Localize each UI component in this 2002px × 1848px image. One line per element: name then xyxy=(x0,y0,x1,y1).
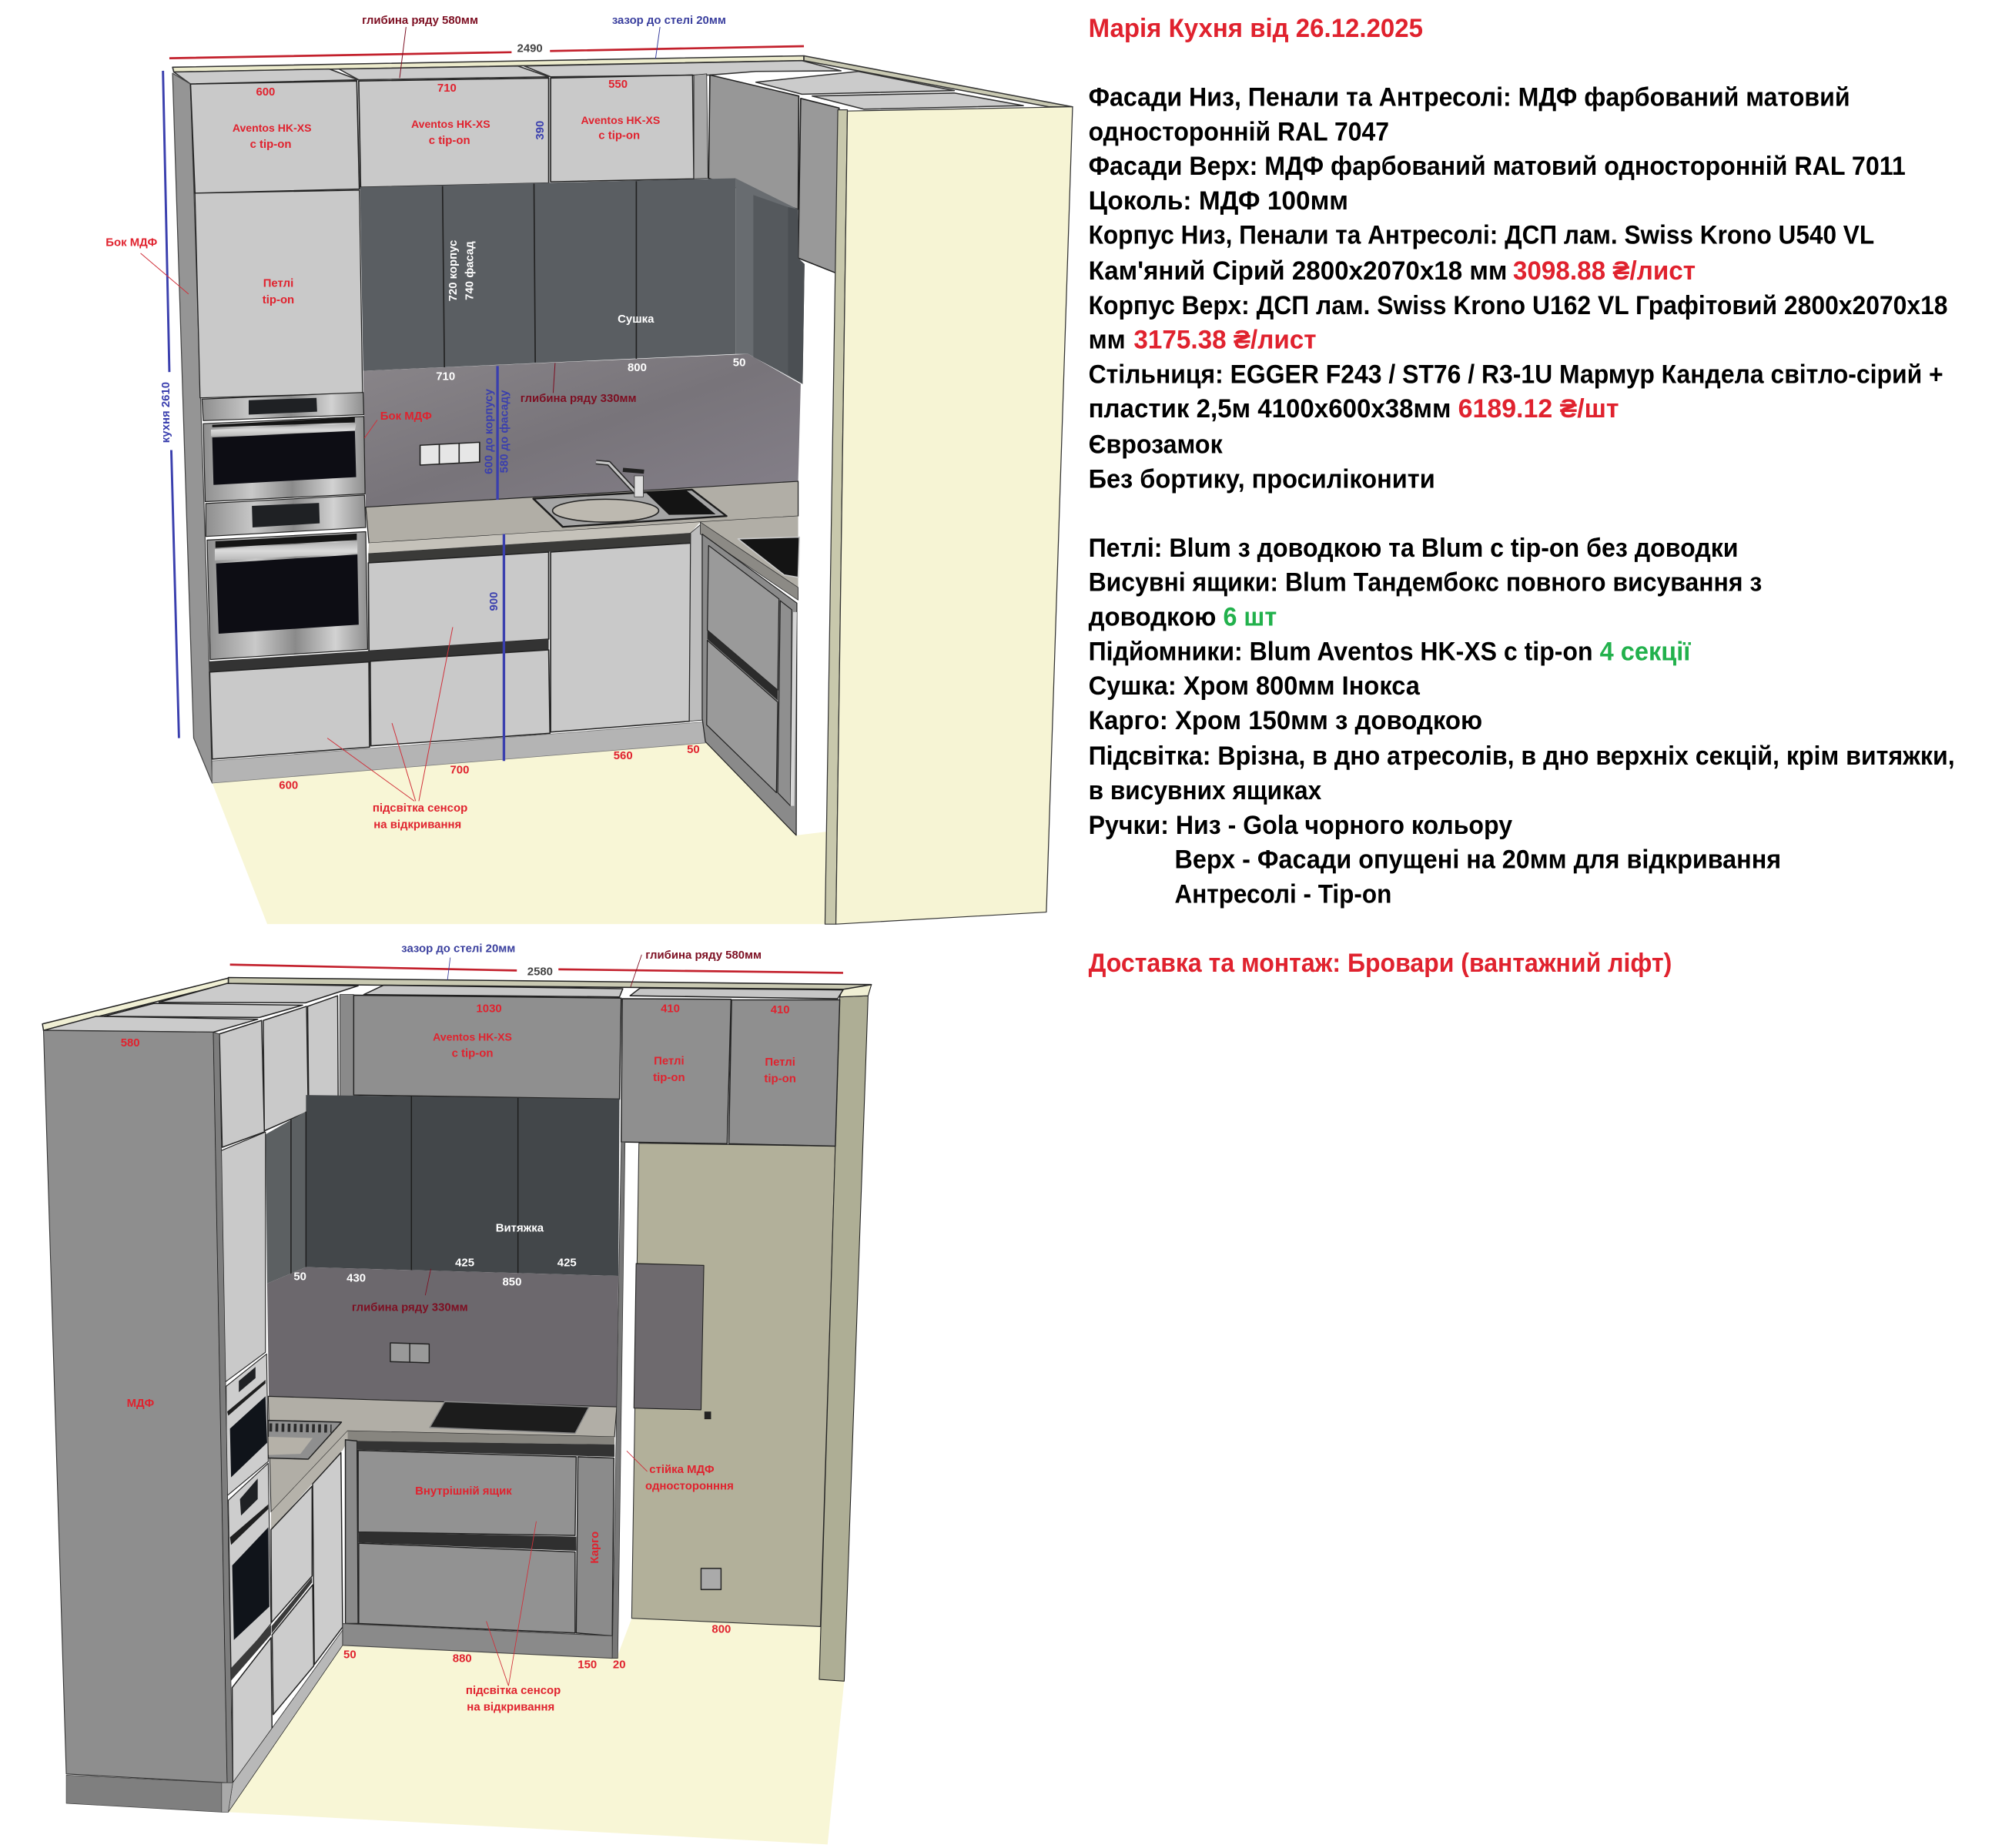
kitchen 2 annotations: 2580 xyxy=(527,965,553,978)
materials specification text block: Фасади Низ, Пенали та Антресолі: МДФ фарбований матовий xyxy=(1089,83,1850,112)
materials specification text block: Корпус Верх: ДСП лам. Swiss Krono U162 VL Графітовий 2800x2070x18 xyxy=(1089,291,1948,320)
kitchen 1 annotations: 2490 xyxy=(517,42,543,55)
kitchen 1 annotations: 710 xyxy=(437,82,457,95)
left wall antresol fronts xyxy=(219,996,338,1147)
hardware specification text block: доводкою xyxy=(1089,602,1216,631)
materials specification text block: Корпус Низ, Пенали та Антресолі: ДСП лам. Swiss Krono U540 VL xyxy=(1089,221,1874,250)
kitchen 1 annotations: 700 xyxy=(450,763,469,776)
wall backsplash piece xyxy=(634,1264,704,1410)
kitchen 1 annotations: 800 xyxy=(628,361,647,374)
materials specification text block: 3175.38 ₴/лист xyxy=(1133,326,1317,355)
materials specification text block: Без бортику, просиліконити xyxy=(1089,464,1435,494)
upper dark cabinets xyxy=(360,178,805,384)
left lower fronts xyxy=(228,1453,343,1812)
kitchen 1 annotations: кухня 2610 xyxy=(159,382,172,443)
kitchen 2 annotations: 430 xyxy=(346,1271,366,1284)
ceiling strip and plates xyxy=(42,978,872,1032)
kitchen 2 annotations: МДФ xyxy=(127,1397,154,1410)
backsplash xyxy=(363,354,801,507)
kitchen 1 annotations: Aventos HK-XS xyxy=(411,118,490,130)
kitchen 1 annotations: глибина ряду 580мм xyxy=(362,14,478,27)
kitchen 1 annotations: Бок МДФ xyxy=(105,236,158,249)
kitchen view 1: sink wall 3D render xyxy=(105,14,1073,924)
corner post xyxy=(612,1142,625,1659)
wall cabinets: antresol fronts xyxy=(190,74,839,273)
materials specification text block: Фасади Верх: МДФ фарбований матовий односторонній RAL 7011 xyxy=(1089,152,1906,181)
materials specification text block: Єврозамок xyxy=(1089,430,1224,460)
kitchen 2 annotations: 880 xyxy=(453,1652,472,1665)
materials specification text block: 6189.12 ₴/шт xyxy=(1458,394,1619,424)
kitchen 1 annotations: c tip-on xyxy=(250,138,291,151)
kitchen 2 annotations: Карго xyxy=(588,1532,601,1564)
kitchen 2 annotations: Петлі xyxy=(765,1056,795,1069)
kitchen 2 annotations: стійка МДФ xyxy=(649,1463,715,1476)
kitchen 2 annotations: 410 xyxy=(771,1003,790,1016)
oven lower xyxy=(206,495,367,659)
kitchen 2 annotations: 580 xyxy=(121,1036,140,1050)
right end panel xyxy=(825,107,1073,924)
countertop xyxy=(268,1396,617,1530)
hardware specification text block: 6 шт xyxy=(1224,602,1277,631)
kitchen 1 annotations: 740 фасад xyxy=(464,241,477,300)
kitchen 1 annotations: 390 xyxy=(534,121,547,140)
materials specification text block: Цоколь: МДФ 100мм xyxy=(1089,186,1348,216)
floor xyxy=(213,742,826,924)
kitchen 2 annotations: 425 xyxy=(455,1256,474,1269)
kitchen 1 annotations: Бок МДФ xyxy=(380,410,432,423)
hardware specification text block: Ручки: Низ - Gola чорного кольору xyxy=(1089,811,1512,840)
kitchen 1 annotations: 720 корпус xyxy=(447,240,460,301)
centre lower run xyxy=(343,1440,614,1659)
kitchen 2 annotations: c tip-on xyxy=(452,1046,493,1060)
kitchen 2 annotations: Витяжка xyxy=(496,1222,544,1235)
kitchen 1 annotations: 50 xyxy=(687,743,700,756)
kitchen 2 annotations: tip-on xyxy=(764,1073,796,1086)
kitchen 1 annotations: 580 до фасаду xyxy=(497,390,511,473)
delivery note: Доставка та монтаж: Бровари (вантажний ліфт) xyxy=(1089,949,1672,978)
right wall xyxy=(631,1143,835,1626)
hardware specification text block: Висувні ящики: Blum Тандембокс повного висування з xyxy=(1089,568,1762,598)
hardware specification text block: 4 секції xyxy=(1600,637,1692,666)
materials specification text block: мм xyxy=(1089,326,1126,355)
materials specification text block: Кам'яний Сірий 2800x2070x18 мм xyxy=(1089,256,1507,286)
kitchen 1 annotations: tip-on xyxy=(263,293,294,306)
kitchen 2 annotations: Петлі xyxy=(654,1054,685,1067)
materials specification text block xyxy=(1089,83,1948,494)
kitchen 1 annotations: Aventos HK-XS xyxy=(233,122,312,134)
left side panel xyxy=(172,73,213,783)
kitchen 1 annotations: 550 xyxy=(608,78,628,91)
ceiling strip and top plates xyxy=(172,55,1073,109)
kitchen 1 annotations: 600 до корпусу xyxy=(483,388,496,474)
sockets xyxy=(420,442,480,465)
materials specification text block: 3098.88 ₴/лист xyxy=(1513,256,1696,286)
lower fronts xyxy=(209,524,705,783)
left tall side panel xyxy=(44,1030,233,1812)
countertop xyxy=(366,481,798,563)
kitchen view 2: hob wall 3D render xyxy=(42,942,872,1844)
hardware specification text block: в висувних ящиках xyxy=(1089,776,1321,805)
kitchen 1 annotations: зазор до стелі 20мм xyxy=(612,14,726,27)
kitchen 1 annotations: на відкривання xyxy=(373,819,461,832)
hardware specification text block: Підсвітка: Врізна, в дно атресолів, в дно верхніх секцій, крім витяжки, xyxy=(1089,742,1955,771)
kitchen 2 annotations: глибина ряду 330мм xyxy=(352,1301,468,1314)
tall unit xyxy=(195,190,363,398)
kitchen 2 annotations: 410 xyxy=(661,1002,680,1015)
wall outlet dot xyxy=(705,1411,711,1419)
hardware specification text block: Антресолі - Tip-on xyxy=(1175,879,1391,909)
kitchen 2 annotations: підсвітка сенсор xyxy=(466,1684,561,1697)
sink and faucet xyxy=(534,462,727,527)
kitchen 2 annotations xyxy=(121,942,796,1713)
kitchen 2 annotations: на відкривання xyxy=(467,1700,554,1713)
kitchen 1 annotations: 560 xyxy=(614,749,633,762)
kitchen 2 annotations: tip-on xyxy=(653,1071,685,1084)
tall unit xyxy=(219,1132,266,1386)
kitchen 2 annotations: односторонння xyxy=(645,1480,734,1493)
kitchen 2 annotations: 50 xyxy=(343,1648,357,1661)
dimension lines and leaders xyxy=(230,955,843,1686)
top cabinets xyxy=(353,995,840,1146)
oven upper xyxy=(226,1354,268,1496)
hardware specification text block: Сушка: Хром 800мм Інокса xyxy=(1089,671,1421,701)
hardware specification text block: Карго: Хром 150мм з доводкою xyxy=(1089,706,1482,735)
floor xyxy=(228,1619,844,1844)
kitchen 2 annotations: 800 xyxy=(711,1622,731,1635)
hob xyxy=(430,1401,589,1433)
kitchen 1 annotations: Aventos HK-XS xyxy=(581,114,660,126)
kitchen 2 annotations: зазор до стелі 20мм xyxy=(401,942,515,956)
hardware specification text block xyxy=(1089,534,1955,909)
kitchen 1 annotations: підсвітка сенсор xyxy=(373,802,467,815)
kitchen 1 annotations: 600 xyxy=(279,778,298,792)
kitchen 1 annotations: глибина ряду 330мм xyxy=(521,392,637,405)
kitchen 2 annotations: 425 xyxy=(557,1256,577,1269)
materials specification text block: пластик 2,5м 4100x600x38мм xyxy=(1089,394,1451,424)
sockets xyxy=(390,1343,429,1363)
kitchen 2 annotations: 20 xyxy=(613,1659,626,1672)
materials specification text block: односторонній RAL 7047 xyxy=(1089,117,1389,146)
kitchen 1 annotations: c tip-on xyxy=(429,134,470,147)
hardware specification text block: Підйомники: Blum Aventos HK-XS с tip-on xyxy=(1089,637,1593,666)
oven upper xyxy=(202,393,365,502)
kitchen 2 annotations: 1030 xyxy=(476,1002,502,1015)
hardware specification text block: Верх - Фасади опущені на 20мм для відкривання xyxy=(1175,845,1781,875)
kitchen 1 annotations: 710 xyxy=(436,370,455,383)
wall socket xyxy=(701,1568,721,1589)
dimension lines and leaders xyxy=(141,27,804,801)
sink xyxy=(268,1421,342,1459)
kitchen 1 annotations: 900 xyxy=(487,592,500,611)
title: Марія Кухня від 26.12.2025 xyxy=(1089,14,1423,43)
kitchen 2 annotations: Aventos HK-XS xyxy=(433,1030,512,1043)
materials specification text block: Стільниця: EGGER F243 / ST76 / R3-1U Мармур Кандела світло-сірий + xyxy=(1089,360,1943,389)
kitchen 2 annotations: Внутрішній ящик xyxy=(415,1485,512,1498)
right return lower run xyxy=(700,516,799,835)
upper dark cabinets xyxy=(266,1095,620,1284)
oven lower xyxy=(226,1463,271,1686)
right end panel xyxy=(819,985,872,1681)
kitchen 1 annotations: c tip-on xyxy=(598,129,640,142)
hardware specification text block: Петлі: Blum з доводкою та Blum с tip-on без доводки xyxy=(1089,534,1739,563)
kitchen 1 annotations: 50 xyxy=(733,356,745,369)
filler xyxy=(340,995,353,1096)
kitchen 1 annotations xyxy=(105,14,745,832)
kitchen 2 annotations: 50 xyxy=(293,1270,306,1284)
kitchen 1 annotations: 600 xyxy=(256,85,275,99)
kitchen 2 annotations: 150 xyxy=(578,1659,597,1672)
kitchen 1 annotations: Сушка xyxy=(618,313,654,326)
backsplash xyxy=(267,1267,618,1407)
kitchen 2 annotations: 850 xyxy=(502,1275,521,1288)
kitchen 2 annotations: глибина ряду 580мм xyxy=(645,949,762,962)
kitchen 1 annotations: Петлі xyxy=(263,277,293,290)
